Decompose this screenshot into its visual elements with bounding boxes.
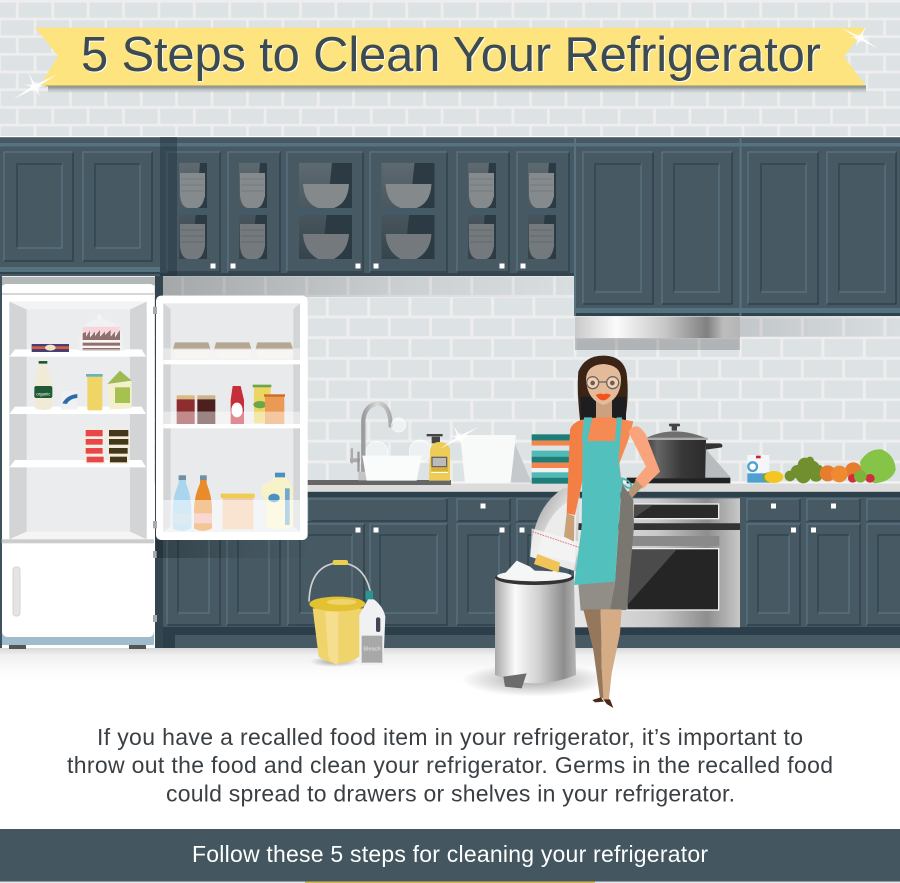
solid doors left bbox=[4, 152, 152, 261]
milk jug bbox=[261, 473, 293, 529]
peppers bbox=[848, 470, 875, 483]
footer text: Follow these 5 steps for cleaning your refrigerator bbox=[192, 841, 708, 867]
stovetop bbox=[627, 478, 730, 483]
green carton bbox=[107, 371, 132, 409]
range hood bbox=[575, 316, 740, 338]
juice bottle bbox=[194, 475, 212, 531]
base knobs bbox=[356, 504, 836, 532]
cabinet shadow on wall bbox=[160, 276, 575, 297]
glasses bbox=[587, 377, 619, 389]
soap bottle bbox=[427, 434, 450, 481]
sponge bbox=[534, 554, 560, 573]
lips bbox=[596, 394, 611, 400]
lower cabinets bbox=[155, 492, 900, 648]
bucket handle bbox=[309, 563, 371, 602]
interior walls bbox=[2, 302, 154, 543]
woman bbox=[564, 356, 660, 708]
solid doors right bbox=[583, 152, 896, 304]
upper brick wall bbox=[0, 0, 900, 137]
jam jars bbox=[177, 395, 215, 424]
hair bbox=[578, 356, 628, 420]
countertop bbox=[155, 480, 900, 492]
hinges bbox=[153, 307, 157, 622]
yogurt tub bbox=[61, 391, 78, 409]
base doors bbox=[167, 524, 900, 625]
bin lid bbox=[530, 487, 580, 572]
box of food bbox=[32, 344, 69, 352]
translucent door bins bbox=[163, 348, 300, 532]
door knobs bbox=[210, 264, 526, 268]
dish basin bbox=[362, 456, 422, 481]
sparkle: banner right bbox=[841, 26, 879, 49]
lemon bbox=[762, 471, 783, 483]
egg cartons bbox=[173, 342, 293, 359]
bin body bbox=[495, 578, 576, 683]
milk carton bbox=[747, 455, 769, 483]
stove items and produce bbox=[627, 424, 896, 483]
water bottle bbox=[173, 475, 191, 531]
title banner bbox=[35, 28, 866, 93]
door panel bbox=[156, 296, 308, 540]
intro paragraph: could spread to drawers or shelves in your refrigerator. bbox=[166, 780, 735, 806]
apron bbox=[574, 417, 631, 585]
open fridge door bbox=[153, 296, 308, 540]
sparkle: soap bbox=[440, 425, 478, 449]
glass doors with bowls bbox=[167, 152, 569, 272]
shirt bbox=[582, 417, 633, 483]
upper cabinets bbox=[0, 136, 900, 316]
freezer handle bbox=[13, 567, 20, 616]
ketchup bottle bbox=[231, 386, 244, 425]
eyes bbox=[590, 381, 615, 385]
faucet bbox=[350, 403, 391, 480]
right arm bbox=[628, 426, 660, 499]
bucket and bleach bbox=[309, 560, 385, 667]
pasta jar bbox=[86, 374, 103, 410]
oven bbox=[574, 498, 740, 627]
floor bbox=[0, 648, 900, 684]
pedal bbox=[503, 673, 527, 688]
shoes bbox=[592, 697, 613, 708]
folded towels bbox=[532, 434, 571, 484]
bleach bottle: Bleach bbox=[363, 647, 381, 653]
plastic bag bbox=[531, 528, 579, 571]
fridge shelves bbox=[9, 349, 146, 467]
hood shadow on wall bbox=[575, 316, 900, 350]
door shadow on cabinets bbox=[156, 540, 306, 558]
title text: 5 Steps to Clean Your Refrigerator bbox=[81, 28, 821, 82]
grapes bbox=[785, 457, 823, 483]
door hinges bbox=[153, 307, 157, 528]
left arm bbox=[564, 419, 584, 542]
intro paragraph: If you have a recalled food item in your refrigerator, it’s important to bbox=[97, 724, 803, 750]
milk bottle: organic bbox=[36, 391, 51, 396]
stacked dark tubs bbox=[108, 429, 129, 463]
pot shadow bbox=[706, 449, 731, 477]
grain container bbox=[221, 494, 255, 529]
intro paragraph: throw out the food and clean your refrigerator. Germs in the recalled food bbox=[67, 752, 833, 778]
skirt bbox=[578, 483, 634, 611]
footer bar bbox=[0, 829, 900, 882]
bucket bbox=[309, 597, 365, 665]
lettuce bbox=[860, 449, 896, 483]
crumpled paper bbox=[505, 561, 558, 578]
face and neck bbox=[586, 364, 621, 422]
bottom edge strip bbox=[0, 882, 900, 883]
intro paragraph bbox=[67, 724, 833, 806]
oranges bbox=[820, 462, 862, 482]
cake under dome bbox=[79, 315, 124, 351]
sparkle: banner left bbox=[13, 72, 57, 100]
kick plate bbox=[155, 627, 900, 648]
freezer base bbox=[2, 632, 154, 645]
legs bbox=[583, 609, 622, 702]
stacked red tubs bbox=[85, 429, 104, 463]
drawers bbox=[308, 499, 900, 521]
cooking pot bbox=[645, 424, 722, 478]
wall items: sink and counter objects bbox=[350, 403, 571, 484]
feet bbox=[9, 645, 146, 649]
white tub and shadow bbox=[460, 435, 532, 483]
trash bin bbox=[462, 487, 608, 697]
milk bottle bbox=[34, 361, 52, 410]
lower brick wall bbox=[0, 276, 900, 484]
refrigerator body bbox=[2, 277, 157, 649]
refrigerator surround shadow bbox=[0, 276, 163, 648]
condiment jars bbox=[253, 385, 285, 424]
bubbles bbox=[366, 418, 431, 463]
refrigerator interior and food bbox=[2, 302, 154, 543]
